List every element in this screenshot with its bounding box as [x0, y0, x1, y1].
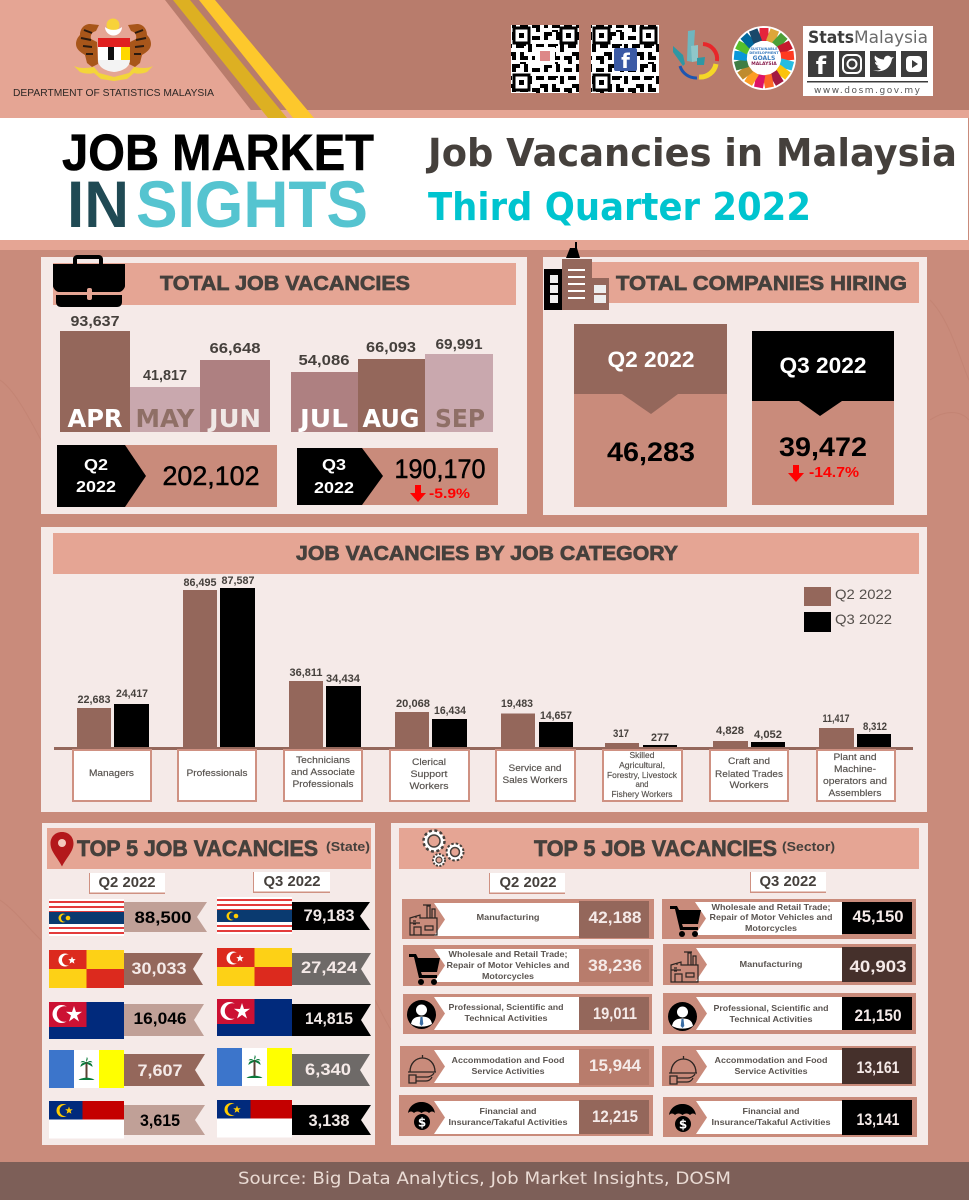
- row 1: Kuala Lumpur flag and values: 79,183: [304, 906, 354, 925]
- card: Q2 2022 companies: [574, 324, 727, 507]
- category labels: Related Trades: [715, 769, 783, 780]
- Q3 row: Wholesale and Retail: Motorcycles: [745, 923, 797, 933]
- Q2 row: Wholesale and Retail: Repair of Motor Vehicles and: [446, 960, 570, 970]
- Q3 row: Professional, Scientific: [663, 993, 916, 1034]
- StatsMalaysia social box: www.dosm.gov.my: [814, 86, 921, 96]
- card: Q2 2022 companies: Q2 2022: [608, 347, 694, 372]
- legend: Q2 2022: [835, 586, 892, 602]
- callout: Q3 total: -5.9%: [429, 485, 471, 501]
- callout: Q2 total: 202,102: [162, 461, 260, 491]
- heading text: TOTAL COMPANIES HIRING: [616, 272, 907, 295]
- panel: total companies hiring: [543, 242, 927, 515]
- bar chart: vacancies by category: 14,657: [540, 710, 572, 722]
- Q2 row: Professional, Scientific: Professional, Scientific and: [448, 1002, 564, 1012]
- row 5: Melaka flag and values: [49, 1100, 371, 1138]
- Q3 row: Wholesale and Retail: Wholesale and Retail Trade;: [712, 902, 831, 912]
- logo title: Job Market Insights: IN: [67, 167, 129, 241]
- row 3: Johor flag and values: [49, 999, 371, 1039]
- logo title: Job Market Insights: [62, 124, 374, 241]
- row 1: Kuala Lumpur flag and values: [49, 897, 370, 936]
- Q3 row: Wholesale and Retail: Repair of Motor Vehicles and: [710, 912, 832, 922]
- icon: map pin: [50, 832, 74, 866]
- Q2 row: Manufacturing: [402, 899, 654, 939]
- bar chart: vacancies by category: 4,052: [754, 729, 782, 741]
- Q2 row: Accommodation and Food: Service Activities: [472, 1066, 545, 1076]
- category labels: Service and: [508, 763, 562, 774]
- title band: [0, 118, 969, 250]
- category labels: Professionals: [186, 768, 248, 779]
- category labels: Fishery Workers: [612, 789, 672, 799]
- icon: SDG wheel: GOALS: [753, 55, 775, 62]
- tag: Q3 2022: [253, 872, 330, 893]
- heading bar: total companies hiring: [590, 262, 919, 303]
- row 2: Selangor flag and values: 27,424: [301, 958, 358, 977]
- category labels: Forestry, Livestock: [607, 770, 678, 780]
- category labels: Plant and: [834, 752, 876, 763]
- heading bar: job category: [53, 533, 919, 574]
- logo title: Job Market Insights: SIGHTS: [136, 167, 368, 241]
- Q3 row: Financial and Insurance: [663, 1097, 917, 1137]
- bar chart: vacancies by category: 19,483: [501, 698, 533, 710]
- category labels: Craft and: [728, 756, 770, 767]
- Q2 row: Professional, Scientific: [403, 994, 652, 1034]
- icon: office buildings: [544, 242, 609, 310]
- category labels: Sales Workers: [502, 775, 568, 786]
- icon: SDG wheel: [732, 26, 796, 90]
- category labels: Agricultural,: [619, 760, 665, 770]
- callout: Q2 total: 2022: [76, 479, 116, 496]
- bar chart: monthly vacancies: 69,991: [436, 336, 482, 353]
- Q2 row: Accommodation and Food: 15,944: [589, 1056, 642, 1075]
- heading bar: state: [47, 828, 371, 869]
- bar chart: monthly vacancies: APR: [68, 404, 122, 433]
- bar chart: vacancies by category: 22,683: [78, 694, 110, 706]
- bar chart: monthly vacancies: 54,086: [298, 352, 350, 369]
- icon: gears: [424, 830, 464, 866]
- Q3 row: Accommodation and Food: [662, 1046, 916, 1086]
- contour texture: [0, 240, 969, 1030]
- bar chart: vacancies by category: 87,587: [222, 575, 254, 587]
- bar chart: monthly vacancies: JUN: [207, 404, 261, 433]
- Q3 row: Accommodation and Food: 13,161: [856, 1058, 900, 1077]
- StatsMalaysia social box: Stats: [808, 28, 854, 48]
- Q3 row: Professional, Scientific: 21,150: [854, 1006, 902, 1025]
- card: Q3 2022 companies: -14.7%: [809, 464, 859, 481]
- legend: [804, 586, 892, 632]
- tag: Q2 2022: Q2 2022: [500, 875, 556, 891]
- subtitle: Third Quarter 2022: [428, 185, 811, 229]
- category labels: Assemblers: [828, 788, 882, 799]
- heading text: TOP 5 JOB VACANCIES: [534, 836, 777, 861]
- icon: SDG wheel: DEVELOPMENT: [749, 51, 779, 55]
- Q2 row: Accommodation and Food: Accommodation and Food: [452, 1055, 564, 1065]
- category labels: and Associate: [291, 767, 355, 778]
- Q2 row: Wholesale and Retail: [403, 945, 653, 986]
- category labels: Workers: [730, 780, 769, 791]
- bar chart: monthly vacancies: MAY: [136, 404, 195, 433]
- panel: top 5 by state: [42, 823, 375, 1145]
- callout: Q3 total: 190,170: [394, 454, 486, 484]
- heading bar: sector: [399, 828, 919, 869]
- tag: Q2 2022: Q2 2022: [98, 875, 156, 891]
- category labels: Skilled: [630, 750, 655, 760]
- bar chart: monthly vacancies: AUG: [362, 404, 420, 433]
- row 2: Selangor flag and values: [49, 948, 371, 988]
- Q2 row: Wholesale and Retail: Wholesale and Retail Trade;: [448, 949, 568, 959]
- StatsMalaysia social box: f: [816, 52, 827, 80]
- heading text: TOP 5 JOB VACANCIES: [77, 836, 318, 861]
- Q2 row: Professional, Scientific: 19,011: [593, 1004, 637, 1023]
- logo title: Job Market Insights: JOB MARKET: [62, 124, 374, 181]
- heading bar: total job vacancies: [53, 263, 516, 305]
- row 4: Penang flag and values: 7,607: [138, 1061, 182, 1080]
- footer source: Source: Big Data Analytics, Job Market Insights, DOSM: [238, 1169, 731, 1189]
- heading suffix: (State): [326, 840, 370, 854]
- panel: job vacancies by job category: [41, 527, 927, 812]
- bar chart: vacancies by category: 24,417: [116, 688, 148, 700]
- row 4: Penang flag and values: 6,340: [305, 1060, 351, 1079]
- bar chart: vacancies by category: 11,417: [822, 713, 850, 725]
- category labels: Managers: [89, 768, 134, 779]
- row 2: Selangor flag and values: 30,033: [132, 959, 186, 978]
- heading suffix: (Sector): [782, 839, 835, 854]
- icon: statistics hand logo: [673, 30, 717, 78]
- bar chart: vacancies by category: 16,434: [434, 705, 467, 717]
- category labels: Machine-: [834, 764, 876, 775]
- header band: [0, 0, 969, 118]
- bar chart: vacancies by category: 20,068: [396, 698, 430, 710]
- Q2 row: Financial and Insurance: Financial and: [480, 1106, 536, 1116]
- card: Q3 2022 companies: 39,472: [779, 432, 867, 462]
- callout: Q3 total: Q3: [322, 457, 346, 474]
- bar chart: monthly vacancies: 93,637: [70, 313, 120, 330]
- bar chart: monthly vacancies: [60, 313, 493, 433]
- main title: Job Vacancies in Malaysia: [425, 131, 957, 175]
- category labels: operators and: [823, 776, 887, 787]
- callout: Q3 total: 2022: [314, 480, 354, 497]
- Q2 row: Financial and Insurance: Insurance/Takaful Activities: [448, 1117, 568, 1127]
- Q3 row: Wholesale and Retail: [662, 899, 916, 939]
- Q3 row: Professional, Scientific: Technical Activities: [730, 1014, 813, 1024]
- callout: Q2 total: [57, 445, 277, 507]
- bar chart: vacancies by category: 277: [651, 732, 669, 744]
- bar chart: vacancies by category: 4,828: [716, 725, 744, 737]
- category labels: [73, 750, 895, 801]
- heading text: JOB VACANCIES BY JOB CATEGORY: [296, 542, 678, 565]
- footer source: [0, 1162, 969, 1200]
- Q2 row: Manufacturing: Manufacturing: [476, 912, 540, 922]
- tag: Q2 2022: [89, 873, 165, 894]
- Q2 row: Manufacturing: 42,188: [588, 908, 642, 927]
- Q3 row: Manufacturing: [663, 944, 916, 985]
- callout: Q2 total: Q2: [84, 457, 108, 474]
- heading text: TOTAL JOB VACANCIES: [160, 272, 410, 295]
- department name: DEPARTMENT OF STATISTICS MALAYSIA: [13, 87, 214, 99]
- bar chart: monthly vacancies: 66,648: [210, 340, 260, 357]
- bar chart: vacancies by category: 34,434: [326, 673, 361, 685]
- QR code: facebook: [591, 25, 659, 93]
- tag: Q3 2022: [750, 872, 826, 893]
- card: Q3 2022 companies: [752, 331, 894, 505]
- StatsMalaysia social box: [803, 26, 933, 96]
- Q3 row: Accommodation and Food: Accommodation and Food: [714, 1055, 828, 1065]
- StatsMalaysia social box: Malaysia: [854, 28, 928, 48]
- category labels: Clerical: [412, 757, 446, 768]
- Q3 row: Financial and Insurance: Financial and: [742, 1106, 800, 1116]
- bar chart: monthly vacancies: 66,093: [366, 339, 416, 356]
- row 5: Melaka flag and values: 3,138: [308, 1111, 350, 1130]
- tag: Q3 2022: Q3 2022: [760, 874, 816, 890]
- row 4: Penang flag and values: [49, 1048, 370, 1088]
- bar chart: vacancies by category: 8,312: [863, 721, 887, 733]
- row 1: Kuala Lumpur flag and values: 88,500: [134, 908, 192, 927]
- QR code: website: [511, 25, 579, 93]
- icon: SDG wheel: SUSTAINABLE: [751, 47, 778, 51]
- Q2 row: Professional, Scientific: Technical Activities: [464, 1013, 548, 1023]
- Q2 row: Wholesale and Retail: Motorcycles: [482, 971, 534, 981]
- Q3 row: Financial and Insurance: 13,141: [856, 1110, 900, 1129]
- bar chart: vacancies by category: 86,495: [184, 577, 216, 589]
- card: Q2 2022 companies: 46,283: [607, 437, 695, 467]
- category labels: Workers: [410, 781, 449, 792]
- tag: Q2 2022: [489, 873, 565, 894]
- category labels: and: [636, 779, 649, 789]
- Q3 row: Wholesale and Retail: 45,150: [852, 907, 904, 926]
- Q3 row: Financial and Insurance: Insurance/Takaful Activities: [712, 1117, 831, 1127]
- legend: Q3 2022: [835, 611, 892, 627]
- tag: Q3 2022: Q3 2022: [264, 874, 320, 890]
- Q2 row: Financial and Insurance: [399, 1095, 653, 1136]
- row 5: Melaka flag and values: 3,615: [140, 1111, 180, 1130]
- Q3 row: Manufacturing: Manufacturing: [740, 959, 802, 969]
- logo: coat of arms: [74, 18, 153, 81]
- Q2 row: Accommodation and Food: [400, 1046, 654, 1087]
- bar chart: monthly vacancies: JUL: [298, 404, 348, 433]
- panel: total job vacancies: [41, 255, 527, 514]
- QR code: facebook: f: [621, 49, 630, 73]
- category labels: Technicians: [296, 755, 350, 766]
- row 3: Johor flag and values: 14,815: [305, 1009, 353, 1028]
- card: Q3 2022 companies: Q3 2022: [780, 353, 866, 378]
- bar chart: vacancies by category: [54, 575, 913, 750]
- bar chart: vacancies by category: 36,811: [290, 667, 322, 679]
- row 3: Johor flag and values: 16,046: [134, 1009, 186, 1028]
- Q2 row: Wholesale and Retail: 38,236: [588, 956, 642, 975]
- callout: Q3 total: [297, 448, 498, 505]
- Q3 row: Accommodation and Food: Service Activities: [734, 1066, 808, 1076]
- bar chart: monthly vacancies: 41,817: [143, 367, 187, 384]
- category labels: Support: [410, 769, 448, 780]
- bar chart: monthly vacancies: SEP: [435, 404, 485, 433]
- icon: SDG wheel: MALAYSIA: [751, 61, 777, 67]
- Q3 row: Manufacturing: 40,903: [850, 957, 906, 976]
- category labels: Professionals: [292, 779, 354, 790]
- Q2 row: Financial and Insurance: 12,215: [592, 1107, 638, 1126]
- icon: briefcase: [53, 255, 125, 307]
- Q3 row: Professional, Scientific: Professional, Scientific and: [714, 1003, 828, 1013]
- bar chart: vacancies by category: 317: [613, 728, 629, 740]
- panel: top 5 by sector: [391, 823, 928, 1145]
